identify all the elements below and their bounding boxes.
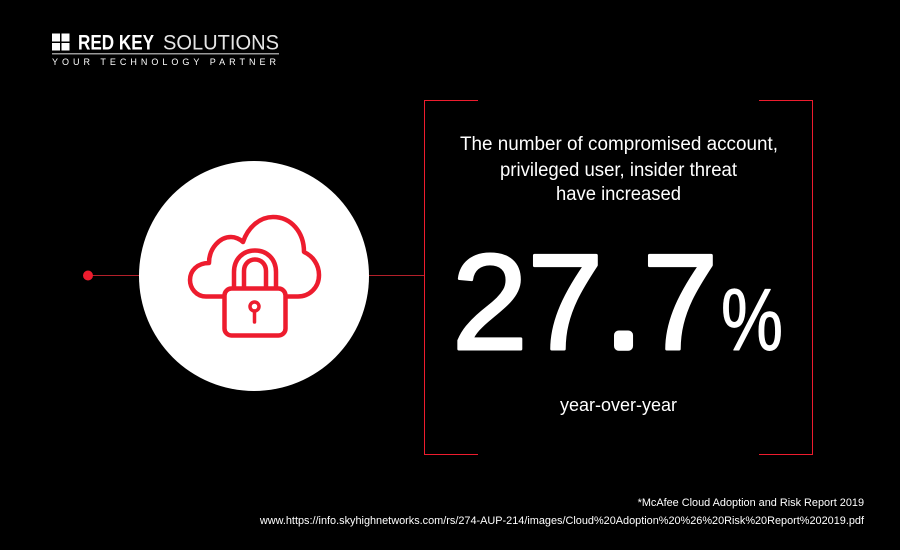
- source note: [259, 497, 865, 527]
- big statistic: .: [610, 256, 637, 368]
- connector dot: [83, 270, 93, 280]
- connector line: [88, 274, 424, 276]
- logo wordmark bold: RED KEY: [78, 30, 154, 54]
- heading text: The number of compromised account,: [460, 134, 778, 155]
- logo tagline: YOUR TECHNOLOGY PARTNER: [52, 57, 276, 67]
- source note: www.https://info.skyhighnetworks.com/rs/274-AUP-214/images/Cloud%20Adoption%20%26%20Risk%20Report%202019.pdf: [259, 515, 865, 527]
- source note: *McAfee Cloud Adoption and Risk Report 2019: [638, 497, 864, 509]
- bracket frame: [424, 100, 812, 454]
- heading text: privileged user, insider threat: [500, 160, 738, 181]
- logo mark: [52, 34, 70, 50]
- logo wordmark light: SOLUTIONS: [163, 30, 279, 54]
- heading text: [460, 134, 778, 205]
- year-over-year label: year-over-year: [560, 395, 677, 415]
- white circle: [139, 161, 369, 391]
- heading text: have increased: [556, 184, 681, 205]
- big statistic: [452, 226, 783, 378]
- big statistic: 7: [528, 226, 603, 378]
- big statistic: 2: [452, 226, 528, 378]
- big statistic: 7: [642, 226, 718, 378]
- big statistic: %: [721, 270, 783, 369]
- logo: [52, 30, 279, 67]
- icon: cloud with padlock: [190, 217, 319, 336]
